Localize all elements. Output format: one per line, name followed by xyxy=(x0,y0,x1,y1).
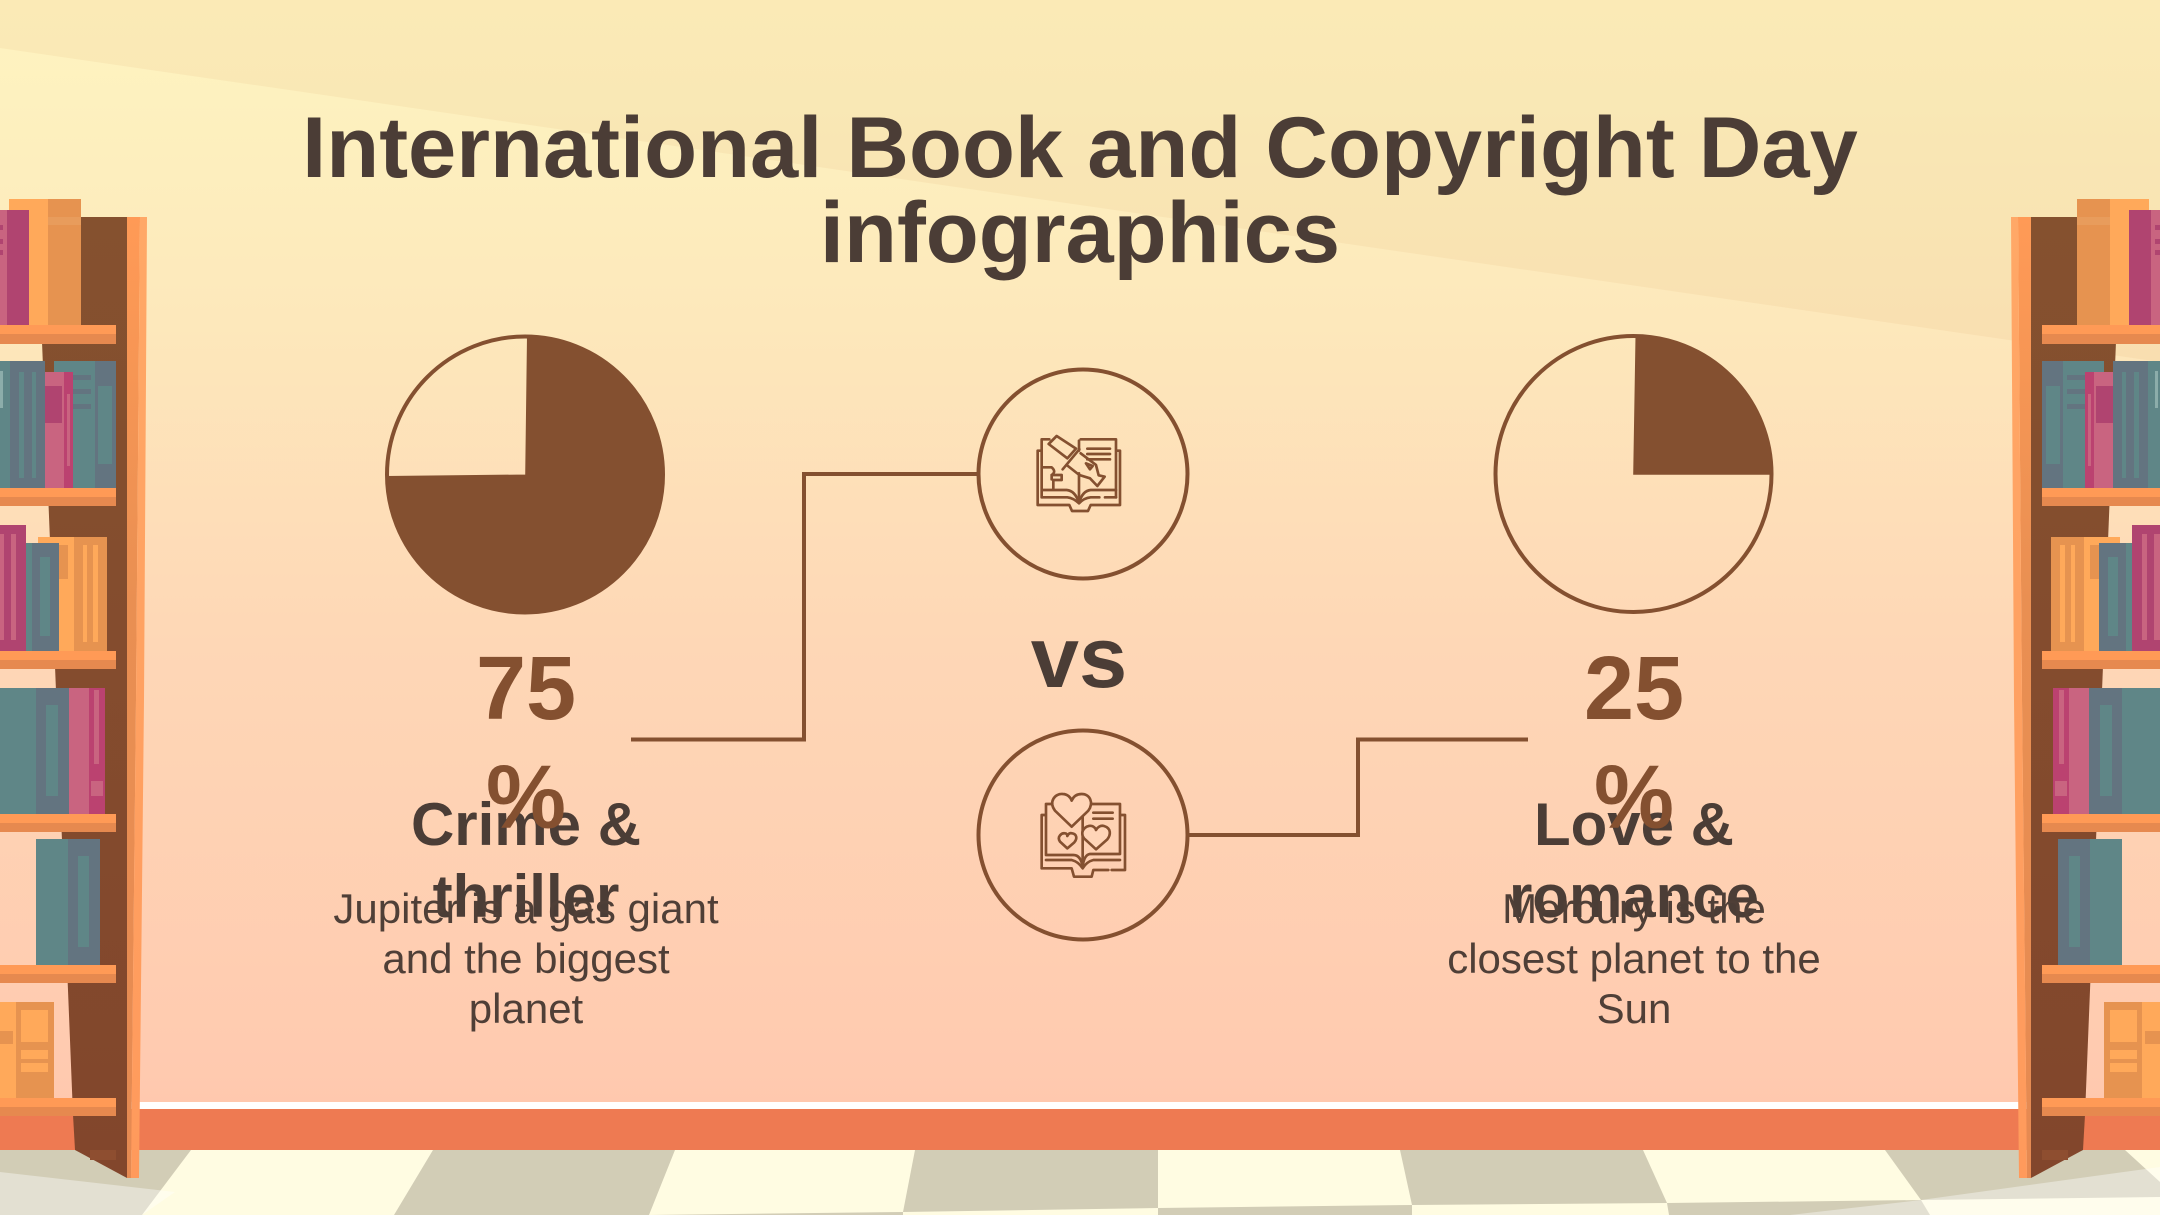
number: 75%: % xyxy=(486,748,566,848)
number: 25%: 25 xyxy=(1584,639,1684,739)
number: 25%: % xyxy=(1594,748,1674,848)
description: Jupiter: planet xyxy=(469,985,584,1032)
heading: love & romance: romance xyxy=(1509,863,1759,930)
number: 75% xyxy=(476,639,576,848)
title: infographics xyxy=(820,185,1340,281)
bookcase upright xyxy=(127,217,147,1178)
ceiling light wedge xyxy=(0,0,2160,362)
floor reflection right xyxy=(1790,1167,2160,1215)
description: Jupiter xyxy=(333,885,719,1032)
heading: crime & thriller xyxy=(411,791,641,930)
books row 5 xyxy=(36,839,100,965)
heading: crime & thriller: thriller xyxy=(433,863,619,930)
icon circle: crime book xyxy=(978,370,1188,578)
floor reflection left xyxy=(0,1172,175,1215)
bookcase back panel xyxy=(37,217,127,1178)
right bookcase xyxy=(2011,199,2160,1178)
heading: crime & thriller: Crime & xyxy=(411,791,641,858)
vs label: vs xyxy=(1031,610,1127,706)
heading: love & romance xyxy=(1509,791,1759,930)
description: Mercury xyxy=(1447,885,1821,1032)
number: 75%: 75 xyxy=(476,639,576,739)
icon circle: romance book xyxy=(978,730,1188,940)
connector: left pie to top icon xyxy=(631,474,977,740)
shelves xyxy=(0,325,116,1116)
title: International Book and Copyright Day xyxy=(302,100,1858,196)
description: Jupiter: and the biggest xyxy=(382,935,670,982)
connector: bottom icon to right pie xyxy=(1189,740,1528,835)
description: Mercury: Mercury is the xyxy=(1502,885,1766,932)
left bookcase xyxy=(0,199,147,1178)
number: 25% xyxy=(1584,639,1684,848)
title xyxy=(302,100,1858,281)
description: Mercury: Sun xyxy=(1597,985,1671,1032)
books row 3 xyxy=(0,525,107,651)
books row 1 xyxy=(0,199,81,325)
left column: crime & thriller xyxy=(333,639,719,1032)
description: Mercury: closest planet to the xyxy=(1447,935,1821,982)
books row 6 xyxy=(0,1002,54,1098)
pie chart: 75% xyxy=(387,336,664,613)
books row 2 xyxy=(0,361,116,488)
icon: book with hearts xyxy=(1042,794,1125,877)
icon: book with quill xyxy=(1038,436,1120,511)
right column: love & romance xyxy=(1447,639,1821,1032)
books row 4 xyxy=(0,688,105,814)
pie chart: 25% xyxy=(1496,336,1772,612)
skirting board xyxy=(0,1102,2160,1150)
checkered floor xyxy=(0,1150,2160,1215)
description: Jupiter: Jupiter is a gas giant xyxy=(333,885,719,932)
heading: love & romance: Love & xyxy=(1534,791,1734,858)
